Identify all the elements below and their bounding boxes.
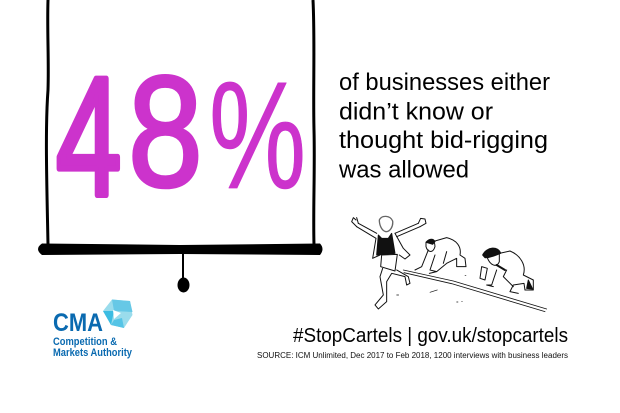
big statistic: 48%: % bbox=[209, 51, 306, 221]
big statistic: 48%: 4 bbox=[56, 42, 121, 231]
CMA logo: Markets Authority bbox=[53, 347, 133, 359]
logo hexagon icon bbox=[103, 300, 132, 328]
CMA logo: Competition & bbox=[53, 336, 117, 348]
hashtag and website: #StopCartels | gov.uk/stopcartels bbox=[293, 324, 568, 347]
description text: didn’t know or bbox=[339, 98, 493, 126]
runner woman bbox=[352, 216, 426, 309]
illustration: business people on a running track bbox=[352, 216, 547, 312]
description text: was allowed bbox=[338, 156, 469, 184]
description text: thought bid-rigging bbox=[339, 127, 548, 154]
description text bbox=[338, 69, 550, 184]
track lines bbox=[403, 270, 547, 312]
crouching woman bbox=[480, 248, 533, 293]
CMA logo: CMA bbox=[53, 309, 103, 337]
CMA logo bbox=[53, 300, 133, 359]
big statistic: 48% bbox=[56, 42, 306, 231]
big statistic: 48%: 8 bbox=[128, 44, 203, 220]
source line: SOURCE: ICM Unlimited, Dec 2017 to Feb 2018, 1200 interviews with business leaders bbox=[257, 351, 568, 360]
projector screen bbox=[38, 0, 322, 292]
description text: of businesses either bbox=[339, 69, 550, 96]
crouching man bbox=[415, 238, 466, 273]
